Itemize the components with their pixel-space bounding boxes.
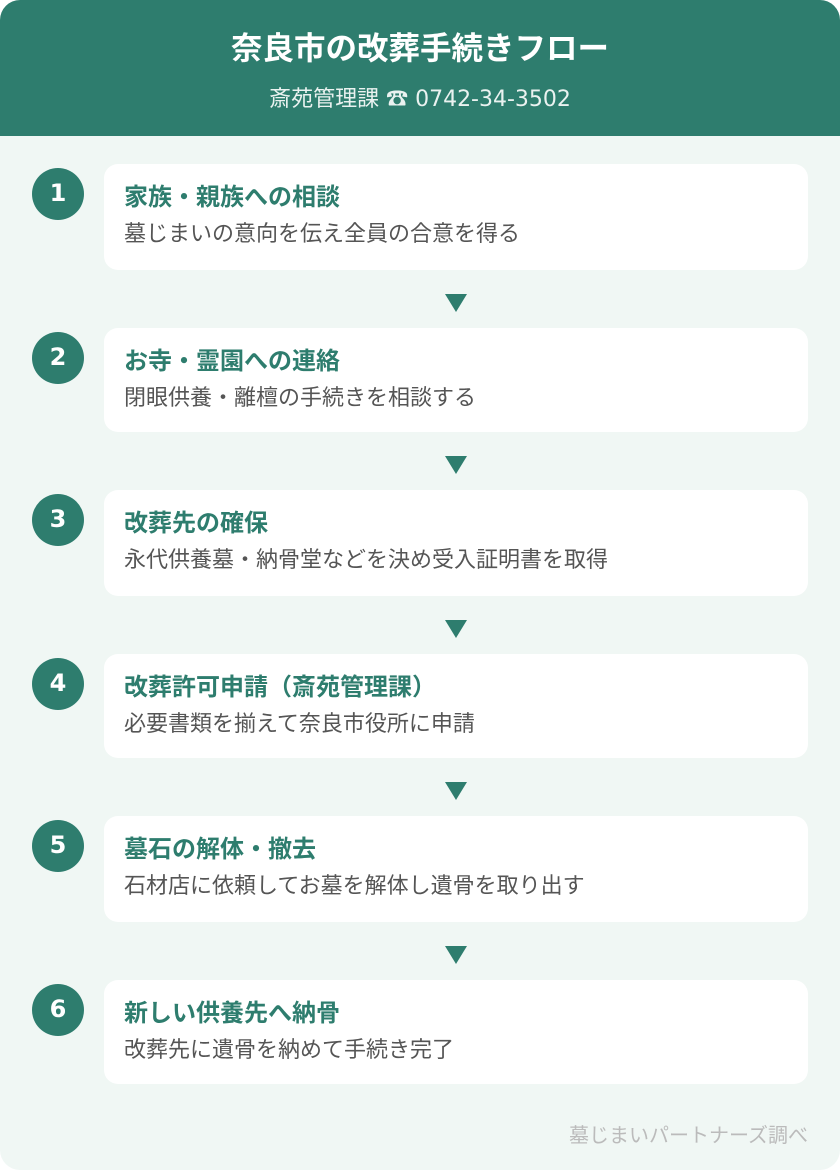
step 2 card bbox=[104, 328, 808, 432]
arrow 1 bbox=[445, 294, 467, 312]
step 2 number bbox=[32, 332, 84, 384]
arrow 5 bbox=[445, 946, 467, 964]
step 4 heading: 改葬許可申請（斎苑管理課） bbox=[124, 673, 436, 701]
step 6 number bbox=[32, 984, 84, 1036]
step 6 number: 6 bbox=[50, 995, 66, 1023]
step 3 number bbox=[32, 494, 84, 546]
step 1 number bbox=[32, 168, 84, 220]
step 4 number bbox=[32, 658, 84, 710]
step 4 number: 4 bbox=[50, 669, 66, 697]
step 3 heading: 改葬先の確保 bbox=[124, 509, 268, 537]
step 1 number: 1 bbox=[50, 179, 66, 207]
step 1 heading: 家族・親族への相談 bbox=[124, 183, 340, 211]
arrow 4 bbox=[445, 782, 467, 800]
step 1 text: 墓じまいの意向を伝え全員の合意を得る bbox=[124, 222, 520, 247]
step 3 text: 永代供養墓・納骨堂などを決め受入証明書を取得 bbox=[124, 548, 608, 573]
step 2 number: 2 bbox=[50, 343, 66, 371]
step 6 heading: 新しい供養先へ納骨 bbox=[124, 999, 340, 1027]
step 5 text: 石材店に依頼してお墓を解体し遺骨を取り出す bbox=[124, 874, 585, 899]
step 4 text: 必要書類を揃えて奈良市役所に申請 bbox=[124, 712, 475, 737]
step 4 card bbox=[104, 654, 808, 758]
step 5 number: 5 bbox=[50, 831, 66, 859]
step 5 heading: 墓石の解体・撤去 bbox=[124, 835, 316, 863]
source note: 墓じまいパートナーズ調べ bbox=[569, 1123, 808, 1147]
arrow 3 bbox=[445, 620, 467, 638]
step 6 card bbox=[104, 980, 808, 1084]
step 6 text: 改葬先に遺骨を納めて手続き完了 bbox=[124, 1038, 454, 1063]
step 3 number: 3 bbox=[50, 505, 66, 533]
header band bbox=[0, 0, 840, 136]
step 5 card bbox=[104, 816, 808, 922]
contact line: 斎苑管理課 ☎ 0742-34-3502 bbox=[269, 81, 571, 113]
title: 奈良市の改葬手続きフロー bbox=[231, 31, 609, 67]
step 5 number bbox=[32, 820, 84, 872]
step 2 heading: お寺・霊園への連絡 bbox=[124, 347, 340, 375]
step 2 text: 閉眼供養・離檀の手続きを相談する bbox=[124, 386, 476, 411]
arrow 2 bbox=[445, 456, 467, 474]
step 1 card bbox=[104, 164, 808, 270]
step 3 card bbox=[104, 490, 808, 596]
